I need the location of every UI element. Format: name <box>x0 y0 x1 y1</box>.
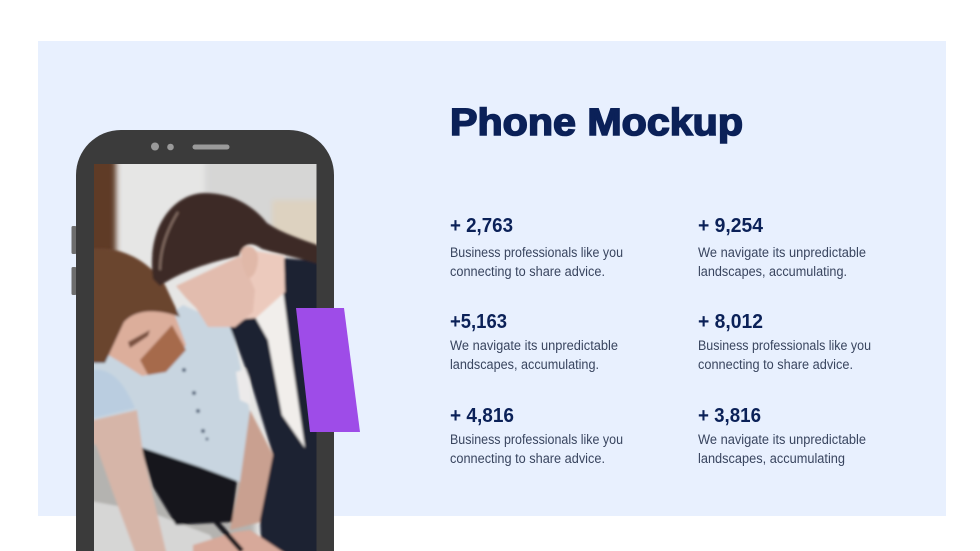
woman's shirt cuff <box>236 368 251 405</box>
stat: 9,254 <box>698 215 866 279</box>
woman's white shirt <box>255 290 305 448</box>
stat: 4,816: Business professionals like you <box>450 432 623 447</box>
man's trousers <box>140 445 237 525</box>
purple accent block <box>296 308 360 432</box>
stat: 2,763: Business professionals like you <box>450 245 623 260</box>
stat: 9,254: + 9,254 <box>698 215 764 237</box>
stat: 3,816: + 3,816 <box>698 405 761 427</box>
phone body <box>76 130 334 551</box>
stat: 3,816 <box>698 405 866 466</box>
phone mockup <box>72 130 334 551</box>
stat: 2,763: + 2,763 <box>450 215 513 237</box>
stat: 5,163: We navigate its unpredictable <box>450 338 618 353</box>
stat: 5,163 <box>450 311 618 372</box>
pen <box>213 520 245 551</box>
phone camera and speaker <box>151 142 230 150</box>
stat: 3,816: landscapes, accumulating <box>698 451 845 466</box>
stat: 9,254: landscapes, accumulating. <box>698 264 847 279</box>
woman's neck <box>245 250 288 322</box>
stat: 9,254: We navigate its unpredictable <box>698 245 866 260</box>
stat: 4,816: + 4,816 <box>450 405 514 427</box>
stat: 8,012: connecting to share advice. <box>698 357 853 372</box>
phone side buttons <box>72 226 76 295</box>
man's shirt buttons <box>182 368 208 440</box>
table and papers <box>94 500 212 551</box>
man's shirt <box>85 305 250 482</box>
man's left arm <box>94 409 167 551</box>
man's face <box>107 310 187 377</box>
woman's forearm <box>230 410 273 530</box>
stat: 5,163: +5,163 <box>450 311 507 333</box>
stat: 2,763 <box>450 215 623 279</box>
stat: 3,816: We navigate its unpredictable <box>698 432 866 447</box>
hand <box>193 530 295 551</box>
stat: 4,816: connecting to share advice. <box>450 451 605 466</box>
background panel <box>38 41 946 516</box>
stat: 4,816 <box>450 405 623 466</box>
title: Phone Mockup <box>450 102 743 144</box>
stat: 8,012 <box>698 311 871 372</box>
stat: 5,163: landscapes, accumulating. <box>450 357 599 372</box>
man's hair <box>85 249 180 363</box>
woman's face <box>176 256 255 327</box>
woman's ear <box>241 246 258 278</box>
stat: 8,012: Business professionals like you <box>698 338 871 353</box>
stat: 2,763: connecting to share advice. <box>450 264 605 279</box>
woman's jacket <box>229 256 316 551</box>
stat: 8,012: + 8,012 <box>698 311 763 333</box>
photo: two colleagues looking at a document <box>94 164 316 551</box>
woman's hair <box>152 193 325 286</box>
